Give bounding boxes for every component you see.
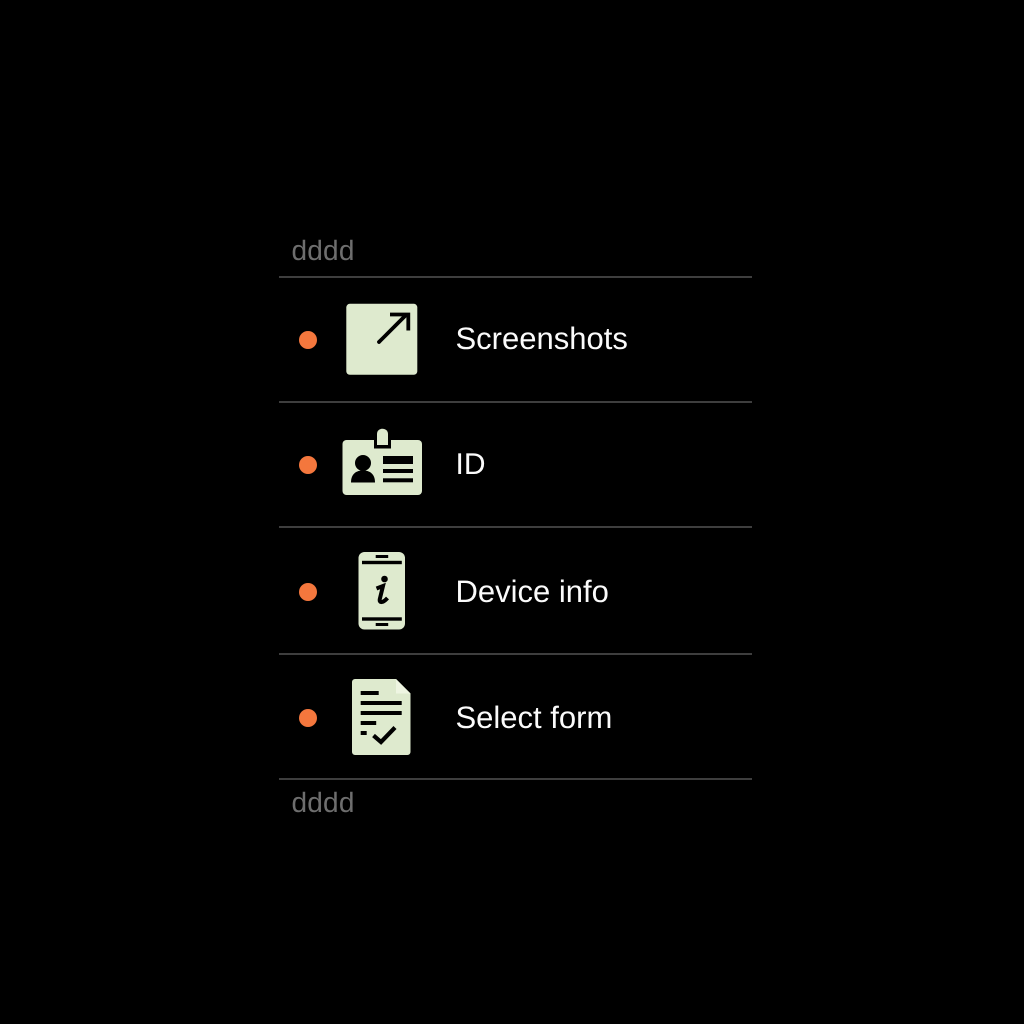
row: Screenshots [299, 321, 628, 356]
label: Screenshots: Screenshots [456, 321, 628, 356]
bullet: Select form [298, 709, 316, 727]
bullet: Screenshots [298, 331, 316, 349]
icon: phone with info [358, 552, 405, 630]
bullet: Device info [298, 583, 316, 601]
footer label: dddd [292, 787, 355, 818]
bullet: ID [298, 456, 316, 474]
row: Device info [299, 574, 609, 609]
icon: ID badge [342, 429, 422, 495]
label: Select form: Select form [456, 700, 612, 735]
icon: form with check [352, 679, 410, 755]
label: ID: ID [456, 448, 486, 481]
row: Select form [299, 700, 612, 735]
row: ID [299, 448, 486, 481]
label: Device info: Device info [456, 574, 609, 609]
icon: screenshot expand arrow [346, 304, 417, 375]
header label: dddd [292, 235, 355, 266]
